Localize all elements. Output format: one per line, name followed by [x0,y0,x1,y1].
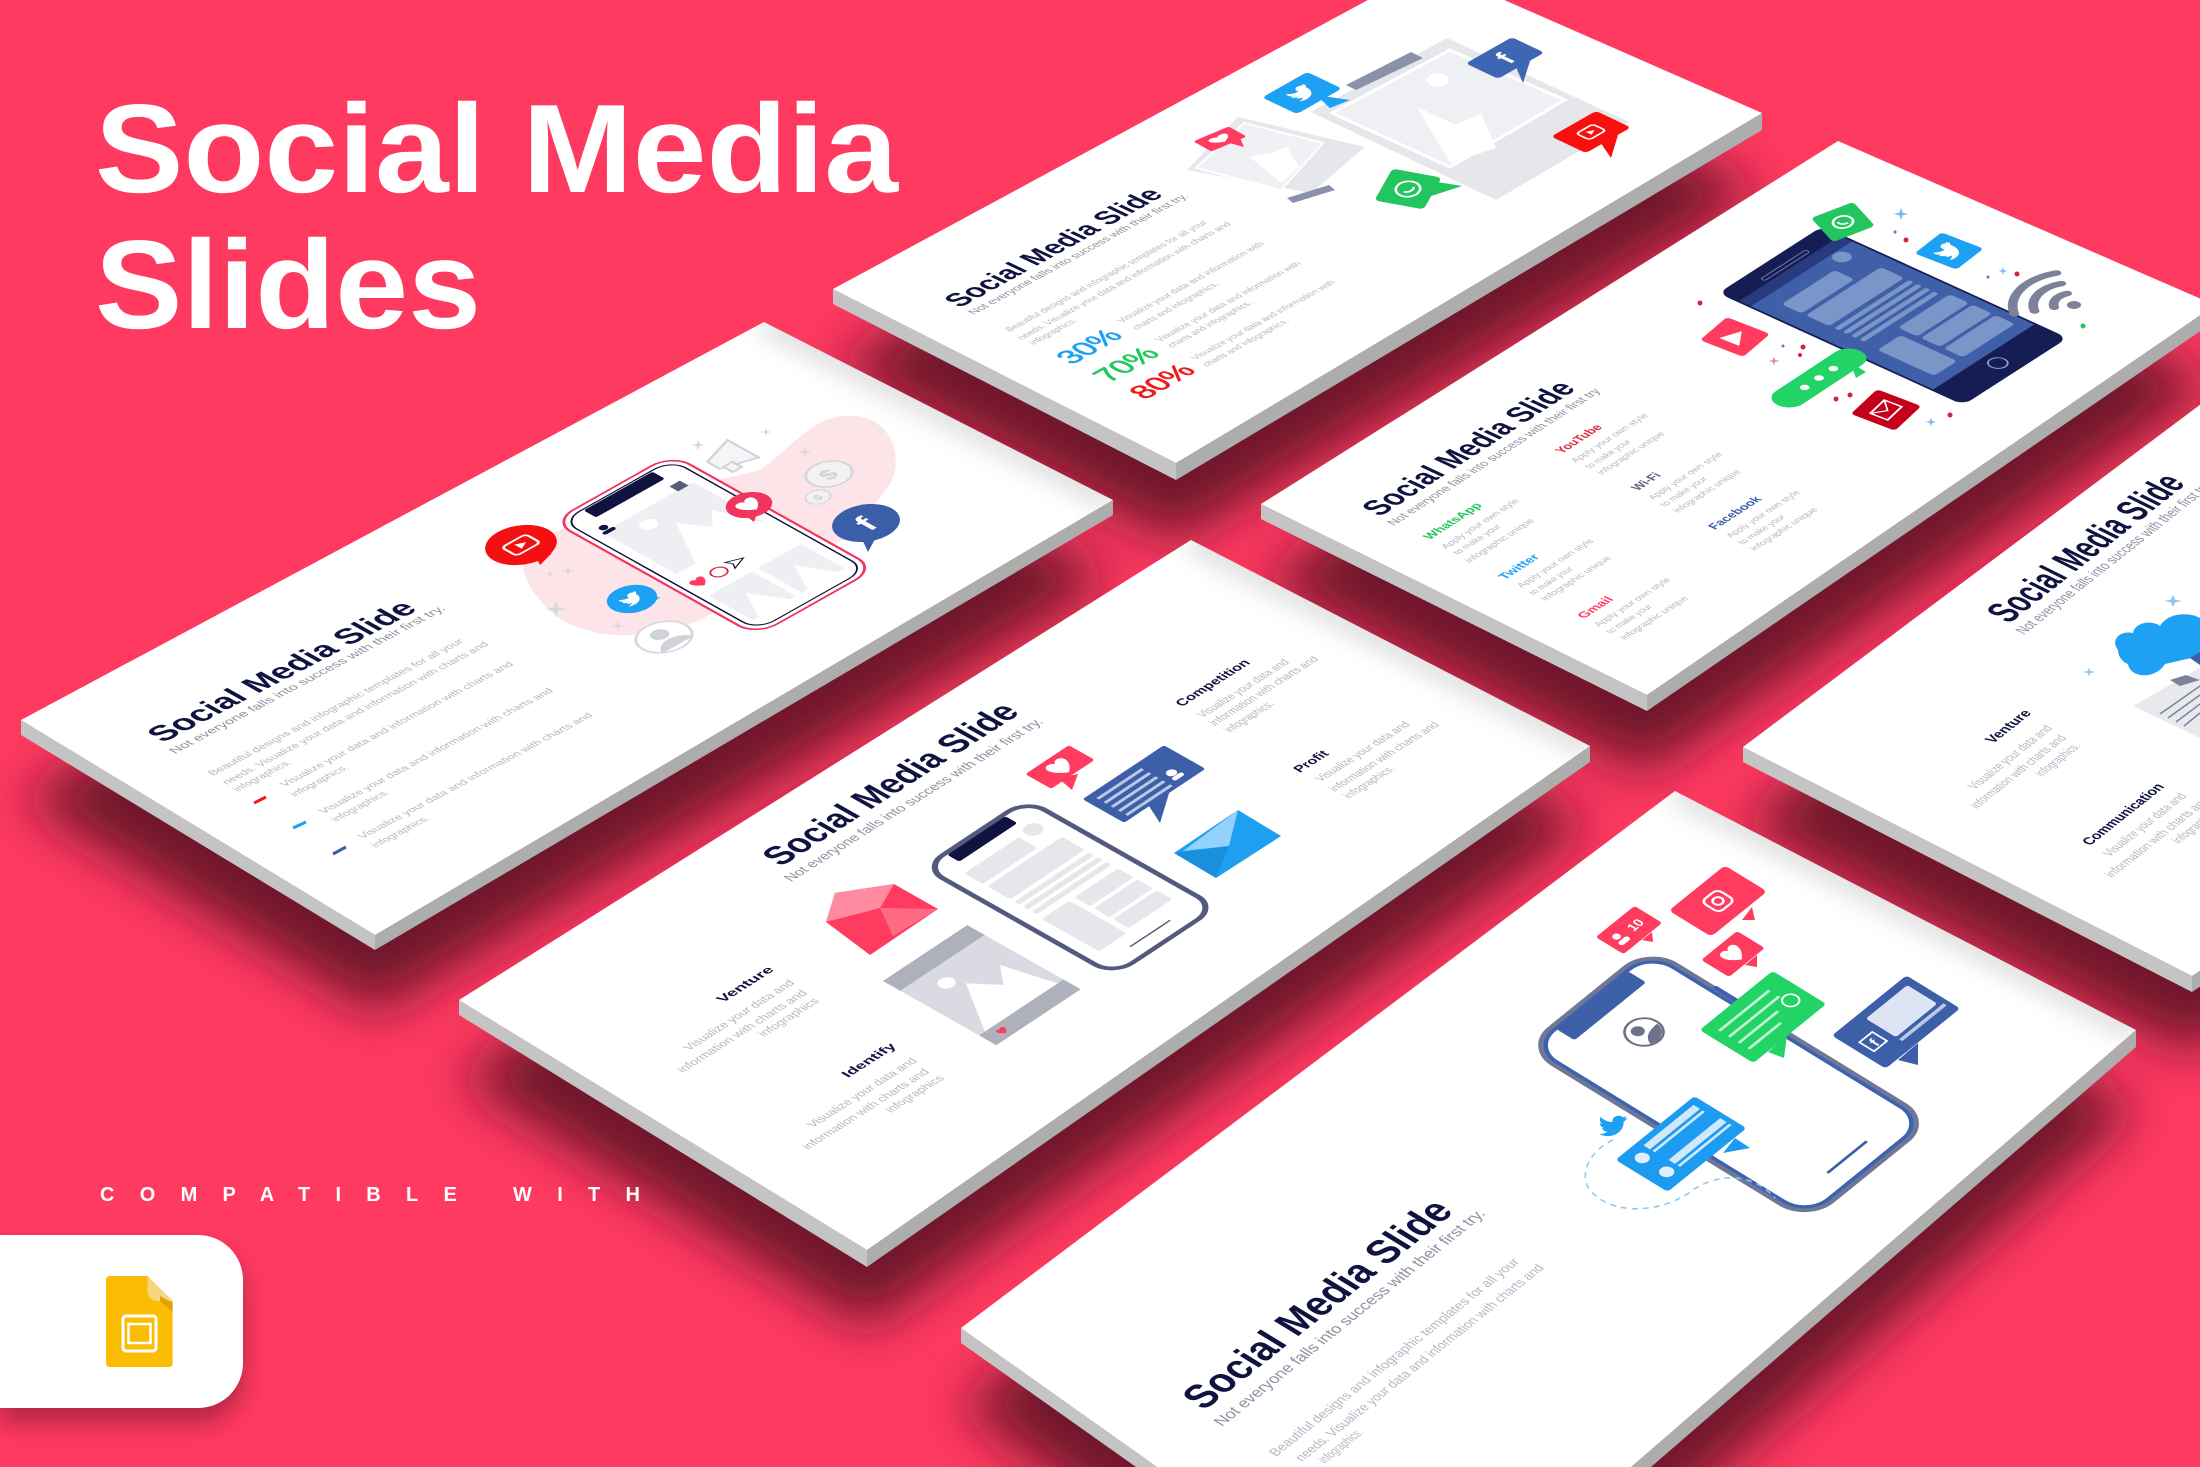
panel: slide centre [459,540,1590,1267]
icon: share reaction [725,555,748,568]
block: Identify: Visualize your data and [803,1056,920,1129]
illustration: phone [1718,226,2068,405]
bullet: red: infographics. [288,764,352,798]
dashed connector [1585,1140,1775,1209]
slide base [1743,404,2200,992]
column: Facebook: to make your [1735,513,1788,546]
column: Gmail: Gmail [1574,595,1617,620]
block: Venture: infographics. [2033,742,2084,779]
column: YouTube: YouTube [1552,422,1606,455]
intro paragraph: infographics. [231,759,295,793]
icon: heart reaction [688,576,711,589]
illustration: photo frames [1187,38,1629,203]
badge: google slides [0,1235,243,1408]
slide base [833,0,1762,480]
intro paragraph: infographics. [1027,317,1080,346]
icon: instagram bubble [1669,865,1767,937]
column: Gmail: Apply your own style [1591,576,1673,628]
column: Wi-Fi [1628,451,1743,514]
block: Profit: information with charts and [1325,720,1442,793]
bullet: dark blue: Visualize your data and information with charts and [356,712,596,840]
column: YouTube: infographic unique [1594,430,1667,476]
icon: twitter circle [597,579,667,619]
icon: large dollar coin: $ [813,466,844,483]
column: WhatsApp: Apply your own style [1438,497,1522,550]
block: Competition: Visualize your data and [1193,657,1293,719]
block: Competition: Competition [1172,657,1254,708]
icon: heart bubble [1193,126,1247,152]
slide base [459,540,1590,1267]
block: Venture: information with charts and [673,988,811,1074]
icon: menu grid [669,481,689,491]
icon: heart bubble [1025,745,1095,790]
column: WhatsApp: WhatsApp [1420,501,1486,541]
column: Gmail: to make your [1603,603,1655,635]
intro paragraph: needs. Visualize your data and information with charts and [220,641,492,786]
column: Wi-Fi: Wi-Fi [1628,471,1665,492]
icon: play square [1700,317,1770,357]
main title: Slides [95,214,481,355]
stat: 30% [1049,241,1268,368]
icon: youtube circle [470,517,572,573]
illustration: phone outline [1528,947,1932,1219]
slide heading: Social Media Slide [139,596,425,747]
icon: followers bubble [1596,906,1662,954]
column: Twitter: Twitter [1495,552,1543,581]
subtitle: Not everyone falls into success with their first try. [780,716,1047,883]
icon: facebook bubble: f [1488,50,1523,67]
panel: slide far right [1743,404,2200,992]
icon: green chat bubble [1700,971,1826,1063]
icon: twitter square [1914,232,1984,270]
bullet: light blue: Visualize your data and information with charts and [317,687,556,815]
block: Communication [2078,781,2200,880]
column: YouTube: to make your [1582,438,1634,470]
intro paragraph: needs. Visualize your data and information with charts and [1015,221,1234,341]
icon: twitter bird [1599,1116,1627,1136]
bullet: light blue: infographics. [329,789,393,823]
panel: slide left with outline phone [21,322,1113,950]
compatible with label: COMPATIBLE WITH [100,1184,640,1206]
panel: slide top right with tablet phone [1261,141,2200,711]
block: Venture [1966,707,2084,811]
icon: blue envelope [1174,810,1281,878]
intro paragraph: infographics. [1315,1427,1366,1466]
block: Identify [798,1040,947,1151]
block: Competition: information with charts and [1205,654,1322,727]
column: Facebook [1705,489,1820,552]
icon: blue chat bubble [1616,1096,1750,1192]
slide heading: Social Media Slide [1353,377,1584,520]
main title: Social Media [95,78,899,219]
icon: youtube bubble [1551,111,1631,158]
panel: slide bottom right [961,791,2136,1467]
stat: 30%: Visualize your data and information with [1115,241,1268,324]
block: Venture: Visualize your data and [679,978,798,1052]
column: WhatsApp [1420,497,1537,564]
illustration: gray picture post [883,925,1081,1045]
subtitle: Not everyone falls into success with their first try. [1211,1207,1490,1429]
subtitle: Not everyone falls into success with their first try. [165,604,449,755]
block: Profit: infographics. [1339,764,1399,800]
badge shadow [0,1250,243,1423]
column: Wi-Fi: infographic unique [1670,468,1743,514]
block: Identify: infographics [881,1073,947,1114]
block: Venture: information with charts and [1968,733,2070,811]
icon: user circle [624,615,704,659]
stat: 70%: Visualize your data and information with [1153,260,1305,343]
stat: 30%: charts and infographics. [1130,281,1222,331]
illustration: document stack [2133,652,2200,738]
icon: wifi [1995,269,2101,329]
bullet: dark blue: infographics. [369,815,433,849]
illustration: phone outline [553,454,876,635]
stat: 30%: 30% [1049,325,1130,368]
intro paragraph: Beautiful designs and infographic templates for all your [1266,1255,1523,1459]
column: Wi-Fi: to make your [1657,475,1710,508]
block: Identify: information with charts and [798,1067,933,1151]
slide base [1261,141,2200,711]
icon: mail square [1851,389,1921,431]
main title [95,78,899,355]
icon: comment reaction [707,565,731,579]
pink blob [523,416,896,635]
block: Venture: Venture [713,964,777,1004]
stat: 80%: 80% [1122,360,1203,403]
slide base [21,322,1113,950]
icon: person small [594,523,617,535]
column: Twitter [1495,537,1614,602]
stat: 80%: Visualize your data and information with [1189,279,1339,361]
stat: 80%: charts and infographics. [1200,318,1292,368]
icon: megaphone [698,440,759,474]
block: Venture: infographics [754,996,823,1038]
icon: small dollar coin: $ [810,493,827,503]
intro paragraph: Beautiful designs and infographic templates for all your [1003,219,1211,333]
bullet: red: Visualize your data and information with charts and [278,661,516,788]
slide heading: Social Media Slide [937,184,1171,311]
block: Venture: Venture [1981,707,2035,746]
slide heading: Social Media Slide [752,697,1028,871]
decorative dots and stars [1698,208,2086,426]
icon: small dollar coin [800,487,836,507]
icon: facebook circle: f [846,512,886,535]
icon: heart badge [716,487,782,523]
subtitle: Not everyone falls into success with their first try. [966,193,1192,316]
block: Venture: Visualize your data and [1966,724,2056,792]
block: Profit [1290,719,1442,800]
block: Competition: infographics. [1220,699,1277,734]
column: Twitter: to make your [1526,566,1576,596]
column: Facebook: Facebook [1705,494,1765,531]
column: WhatsApp: infographic unique [1462,517,1537,564]
icon: heart bubble [1701,931,1765,977]
block: Profit: Profit [1290,748,1333,774]
panel: slide top centre with percentages [833,0,1762,480]
icon: large dollar coin [796,456,862,492]
stat: 80% [1122,279,1339,403]
column: YouTube [1552,412,1667,476]
icon: avatar [1616,1013,1672,1051]
icon: google slides [106,1276,173,1367]
slide heading: Social Media Slide [1172,1192,1463,1416]
block: Venture [673,964,823,1074]
intro paragraph: needs. Visualize your data and information with charts and [1292,1262,1547,1464]
column: Gmail [1574,576,1691,641]
column: Wi-Fi: Apply your own style [1645,451,1725,501]
icon: whatsapp bubble [1374,169,1462,209]
stat: 70%: 70% [1086,343,1167,386]
icon: pink envelope [826,884,938,955]
slide base [961,791,2136,1467]
decorative stars [546,428,811,631]
illustration: phone [924,800,1216,975]
icon: cloud [2115,614,2200,675]
column: Facebook: infographic unique [1747,506,1820,552]
column: YouTube: Apply your own style [1568,412,1651,464]
column: WhatsApp: to make your [1450,523,1504,556]
block: Communication: Visualize your data and [2101,792,2190,859]
intro paragraph: Beautiful designs and infographic templates for all your [206,638,467,777]
column: Twitter: infographic unique [1538,555,1614,602]
icon: blue post bubble [1082,745,1206,823]
block: Identify: Identify [838,1040,900,1079]
column: Twitter: Apply your own style [1514,537,1596,589]
icon: facebook circle [818,496,914,552]
block: Profit: Visualize your data and [1311,719,1413,783]
icon: facebook card [1832,975,1960,1069]
icon: twitter bubble [1262,72,1350,114]
icon: facebook card: f [1865,1036,1885,1049]
icon: whatsapp square [1811,202,1875,242]
column: Gmail: infographic unique [1617,595,1691,641]
block: Communication: Communication [2078,781,2168,848]
icon: green chat pill [1764,345,1874,411]
icon: facebook bubble [1466,37,1544,83]
block: Competition [1172,654,1322,734]
subtitle: Not everyone falls into success with their first try [1384,386,1605,527]
stat: 70% [1086,260,1305,386]
icon: followers bubble: 10 [1623,917,1648,934]
stat: 70%: charts and infographics. [1165,300,1256,349]
icon: stars [2083,595,2182,676]
column: Facebook: Apply your own style [1723,489,1803,539]
